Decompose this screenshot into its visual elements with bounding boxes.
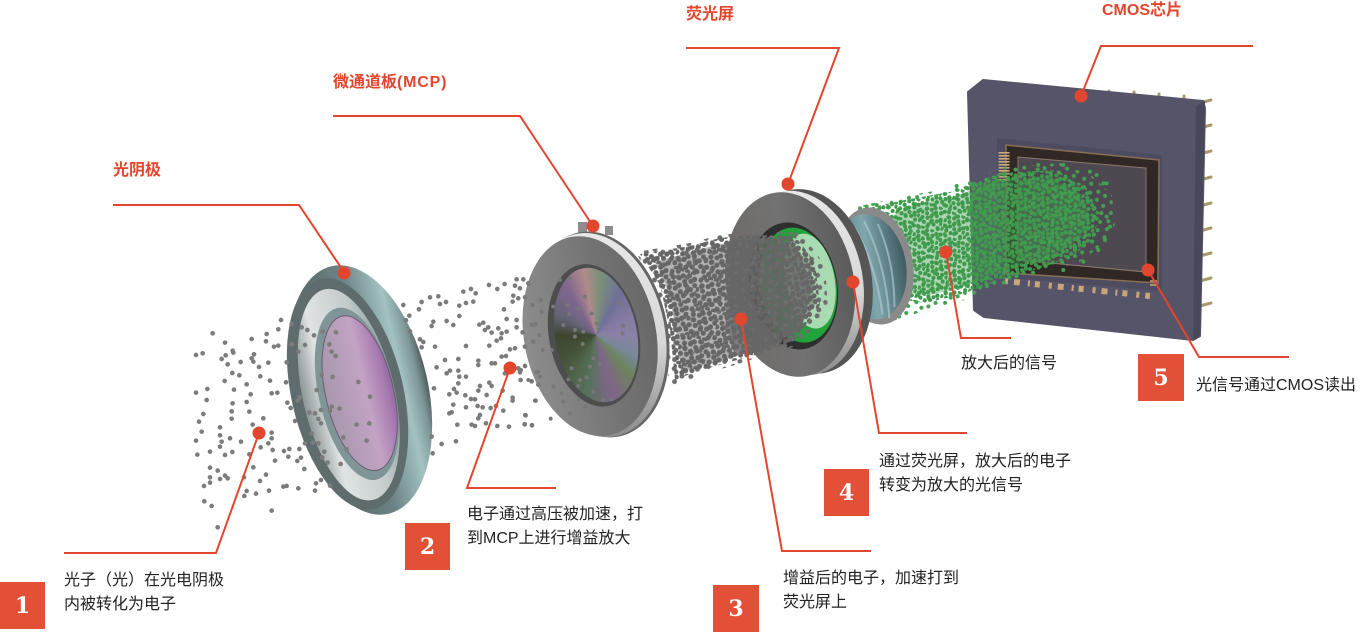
- sensor window: [997, 138, 1162, 291]
- leader: step 3: [734, 312, 871, 551]
- step 3 number: [713, 585, 759, 632]
- step 4 number: [824, 469, 869, 516]
- step 1 number: 1: [15, 592, 30, 618]
- amplified signal text: 放大后的信号: [961, 355, 1057, 372]
- electrons on MCP: [521, 278, 630, 425]
- phosphor screen assembly: [711, 179, 887, 387]
- heading: phosphor screen: 荧光屏: [686, 6, 734, 23]
- green phosphor screen: [777, 229, 843, 333]
- step 1 text: 光子（光）在光电阴极: [64, 572, 224, 589]
- step 2 text: 电子通过高压被加速，打: [467, 506, 643, 523]
- step 2 number: [405, 523, 450, 570]
- CMOS chip: [968, 80, 1211, 341]
- lens barrel: [824, 201, 923, 331]
- step 1 text: [64, 571, 224, 613]
- leader: phosphor label: [686, 48, 839, 190]
- step 2 text: [467, 505, 643, 547]
- inner opening: [739, 215, 848, 357]
- step 4 text: 转变为放大的光信号: [879, 477, 1023, 494]
- step 2 number: 2: [420, 534, 435, 560]
- leader: step 5: [1142, 264, 1289, 357]
- step 4 number: 4: [839, 480, 854, 506]
- chip body: [968, 80, 1205, 340]
- mounting tabs: [578, 222, 613, 235]
- step 5 number: 5: [1153, 364, 1169, 390]
- leader: photocathode label: [113, 205, 350, 280]
- iridescent MCP disc: [543, 260, 649, 410]
- step 1 text: 内被转化为电子: [64, 596, 176, 613]
- heading: MCP: 微通道板(MCP): [333, 74, 447, 91]
- photocathode lens: [264, 251, 455, 529]
- step 5 text: 光信号通过CMOS读出: [1196, 377, 1356, 394]
- sensor active area: [1018, 157, 1146, 272]
- step 2 text: 到MCP上进行增益放大: [467, 530, 631, 547]
- step 3 text: [783, 569, 959, 611]
- step 3 text: 荧光屏上: [783, 594, 847, 611]
- sensor frame: [1006, 145, 1159, 283]
- purple photocathode window: [309, 309, 411, 478]
- leader: step 2: [467, 362, 556, 488]
- sparse electrons: between photocathode and MCP: [403, 279, 538, 453]
- heading: photocathode: 光阴极: [113, 162, 161, 179]
- step 1 number: [0, 582, 45, 629]
- chip pins: [1109, 91, 1211, 306]
- step 3 text: 增益后的电子，加速打到: [783, 570, 959, 587]
- green phosphor ring: [751, 221, 846, 349]
- step 3 number: 3: [728, 596, 744, 622]
- sparse electrons: input side: [196, 320, 370, 527]
- step 4 text: 通过荧光屏，放大后的电子: [879, 453, 1071, 470]
- step 5 number: [1138, 354, 1184, 401]
- leader: step 4: [846, 276, 967, 433]
- bottom bond pads: [1005, 281, 1150, 296]
- leader: CMOS label: [1074, 46, 1253, 102]
- gray electron cloud: [636, 232, 828, 388]
- MCP microchannel plate: [505, 219, 687, 451]
- green photon cloud: [860, 163, 1115, 322]
- heading: CMOS chip: CMOS芯片: [1102, 2, 1182, 19]
- chip side edge: [1193, 101, 1205, 341]
- leader: MCP label: [333, 116, 600, 232]
- leader: amplified signal: [940, 246, 1011, 338]
- step 4 text: [879, 452, 1071, 494]
- left bond pads: [998, 152, 1010, 182]
- leader: step 1: [64, 426, 266, 553]
